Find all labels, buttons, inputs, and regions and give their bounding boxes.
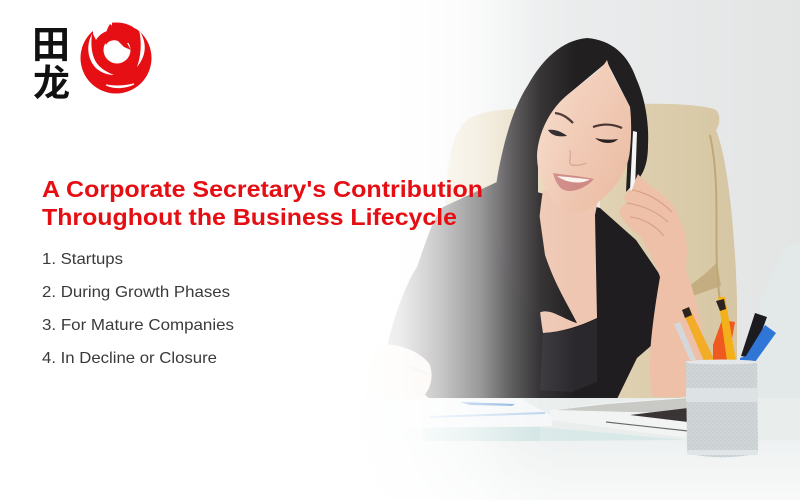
laptop screen (755, 243, 800, 432)
finger lines (627, 190, 672, 236)
list of lifecycle stages: 1. Startups (42, 251, 123, 268)
face (537, 60, 631, 212)
smile (553, 173, 594, 191)
long dark hair (494, 38, 648, 323)
pen in writing hand (405, 365, 428, 374)
jacket and torso (388, 182, 662, 399)
wall background (300, 0, 800, 440)
desk lower panel (300, 440, 800, 500)
right crescent (137, 30, 145, 67)
title (42, 176, 483, 230)
dragon head (105, 24, 134, 50)
eyes (548, 130, 618, 143)
pens and pencils (674, 297, 776, 362)
desk surface (300, 398, 800, 442)
title: A Corporate Secretary's Contribution (42, 176, 483, 202)
list of lifecycle stages: 3. For Mature Companies (42, 317, 234, 334)
logo characters: 田 (32, 25, 70, 67)
writing hand (365, 344, 432, 410)
list of lifecycle stages: 2. During Growth Phases (42, 284, 230, 301)
documents on the desk (400, 398, 552, 428)
inner white circle (104, 36, 130, 64)
logo (32, 19, 152, 105)
office chair (445, 104, 737, 400)
top under jacket (540, 319, 597, 392)
logo: 龙 (33, 63, 70, 105)
list of lifecycle stages: 4. In Decline or Closure (42, 350, 217, 367)
photo: businesswoman on the phone at a desk (300, 0, 800, 500)
nose (570, 150, 586, 165)
neck and chest (537, 190, 600, 333)
dragon emblem (80, 19, 152, 94)
white opening around the head (93, 19, 112, 40)
lower crescent (106, 84, 134, 88)
eyebrows (555, 113, 622, 128)
raised hand and forearm (619, 174, 704, 397)
mesh pencil cup (686, 361, 758, 457)
title: Throughout the Business Lifecycle (42, 204, 457, 230)
left crescent (88, 34, 114, 75)
laptop base (550, 397, 690, 438)
phone (630, 131, 637, 190)
list of lifecycle stages (42, 251, 234, 367)
